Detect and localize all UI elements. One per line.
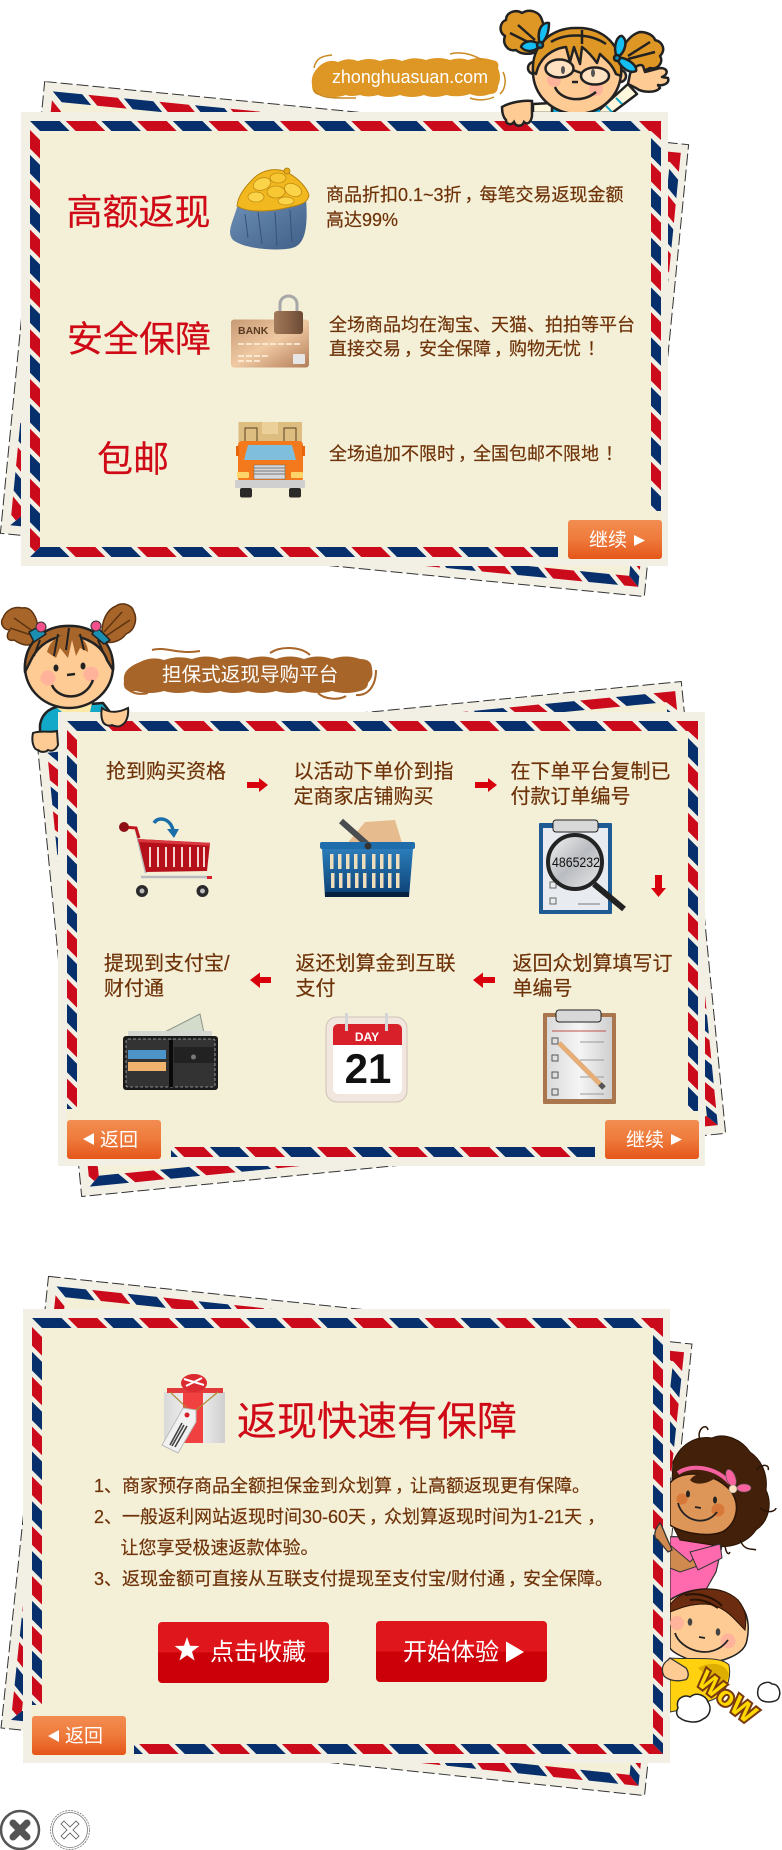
description: rebate: 商品折扣0.1~3折，每笔交易返现金额 bbox=[326, 185, 624, 205]
description: safety: 直接交易，安全保障，购物无忧 ！ bbox=[329, 339, 605, 359]
button: continue: 继续 bbox=[626, 1129, 664, 1151]
step 3: copy order number bbox=[510, 760, 670, 808]
icon: shopping basket bbox=[320, 820, 415, 897]
character hand on edge bbox=[502, 101, 532, 126]
heading: high rebate: 高额返现 bbox=[66, 192, 211, 232]
step 2: order text bbox=[294, 760, 454, 808]
description: safety: 全场商品均在淘宝、天猫、拍拍等平台 bbox=[329, 315, 635, 335]
character: boy with wow sign bbox=[670, 1589, 780, 1730]
icon: close button outline bbox=[50, 1810, 90, 1850]
character: girl with pigtails bbox=[2, 604, 135, 735]
icon: gift box with tag bbox=[162, 1374, 225, 1453]
front envelope bbox=[23, 1309, 670, 1763]
guarantee list: 1、商家预存商品全额担保金到众划算，让高额返现更有保障。 bbox=[94, 1476, 590, 1496]
step 4: fill order number text bbox=[512, 952, 672, 1000]
guarantee list bbox=[94, 1476, 613, 1589]
heading: free shipping: 包邮 bbox=[97, 438, 169, 480]
step 5: return money text bbox=[296, 952, 456, 1000]
guarantee list: 让您享受极速返款体验。 bbox=[120, 1538, 318, 1558]
step 6: withdraw text: 财付通 bbox=[104, 977, 164, 1000]
description: safety bbox=[329, 315, 635, 359]
icon: bank card with lock bbox=[231, 296, 309, 368]
button: bookmark: 点击收藏 bbox=[210, 1639, 306, 1666]
button: back: 返回 bbox=[65, 1725, 103, 1747]
heading: safe guarantee: 安全保障 bbox=[67, 318, 211, 360]
icon: clipboard with magnifier bbox=[539, 820, 624, 914]
title: 返现快速有保障 bbox=[237, 1400, 517, 1444]
icon: shopping cart bbox=[119, 819, 212, 897]
button: back bbox=[32, 1716, 126, 1755]
site name bubble bbox=[312, 53, 505, 100]
icon: delivery truck bbox=[235, 422, 305, 498]
step 1: buy qualification: 抢到购买资格 bbox=[106, 760, 226, 783]
panel: benefits envelope bbox=[0, 11, 689, 596]
icon: clipboard with pencil bbox=[543, 1010, 616, 1104]
character hands on edge bbox=[32, 708, 128, 752]
step 3: copy order number: 在下单平台复制已 bbox=[510, 760, 670, 783]
step 2: order text: 以活动下单价到指 bbox=[294, 760, 454, 783]
guarantee list: 3、返现金额可直接从互联支付提现至支付宝/财付通，安全保障。 bbox=[94, 1569, 613, 1589]
front envelope bbox=[21, 112, 668, 566]
arrow left 1 bbox=[473, 972, 495, 988]
arrow left 2 bbox=[250, 972, 271, 988]
step 4: fill order number text: 单编号 bbox=[512, 977, 572, 1000]
step 4: fill order number text: 返回众划算填写订 bbox=[512, 952, 672, 975]
icon: calendar day 21 bbox=[326, 1013, 407, 1102]
icon: bank card with lock: BANK bbox=[238, 325, 269, 337]
step 6: withdraw text: 提现到支付宝/ bbox=[104, 952, 230, 975]
panel: process envelope bbox=[2, 604, 726, 1196]
button: back: 返回 bbox=[100, 1129, 138, 1151]
icon: coin purse bbox=[230, 168, 309, 249]
character: waving girl with glasses bbox=[501, 11, 668, 114]
character hands on edge bbox=[655, 1523, 688, 1681]
description: shipping: 全场追加不限时，全国包邮不限地 ！ bbox=[329, 444, 623, 464]
button: back bbox=[67, 1120, 161, 1159]
button: bookmark bbox=[158, 1622, 329, 1683]
step 5: return money text: 支付 bbox=[296, 977, 336, 1000]
arrow right 2 bbox=[475, 778, 497, 792]
back envelope bbox=[37, 682, 726, 1196]
button: continue bbox=[605, 1120, 699, 1159]
back envelope bbox=[0, 82, 689, 596]
icon: calendar day 21: DAY bbox=[355, 1030, 379, 1044]
arrow down bbox=[651, 875, 666, 897]
button: start: 开始体验 bbox=[403, 1639, 499, 1666]
icon: wallet bbox=[123, 1014, 218, 1090]
step 6: withdraw text bbox=[104, 952, 230, 1000]
step 3: copy order number: 付款订单编号 bbox=[510, 785, 630, 808]
button: continue bbox=[568, 520, 662, 559]
step 2: order text: 定商家店铺购买 bbox=[294, 785, 434, 808]
icon: close button dark bbox=[1, 1811, 39, 1849]
panel: guarantee envelope bbox=[1, 1276, 780, 1796]
button: start bbox=[376, 1621, 547, 1682]
description: rebate bbox=[326, 185, 624, 230]
heading bubble bbox=[124, 648, 376, 699]
character: curly-haired girl bbox=[670, 1427, 776, 1600]
guarantee list: 2、一般返利网站返现时间30-60天，众划算返现时间为1-21天 ， bbox=[94, 1507, 605, 1527]
step 5: return money text: 返还划算金到互联 bbox=[296, 952, 456, 975]
arrow right 1 bbox=[247, 778, 268, 792]
back envelope bbox=[1, 1276, 692, 1796]
site name bubble: zhonghuasuan.com bbox=[332, 67, 488, 87]
character: boy with wow sign: WoW bbox=[691, 1665, 763, 1730]
icon: calendar day 21: 21 bbox=[345, 1045, 391, 1092]
button: continue: 继续 bbox=[589, 529, 627, 551]
icon: clipboard with magnifier: 4865232 bbox=[552, 854, 600, 870]
front envelope bbox=[58, 712, 705, 1166]
heading bubble: 担保式返现导购平台 bbox=[162, 664, 338, 686]
description: rebate: 高达99% bbox=[326, 210, 398, 230]
